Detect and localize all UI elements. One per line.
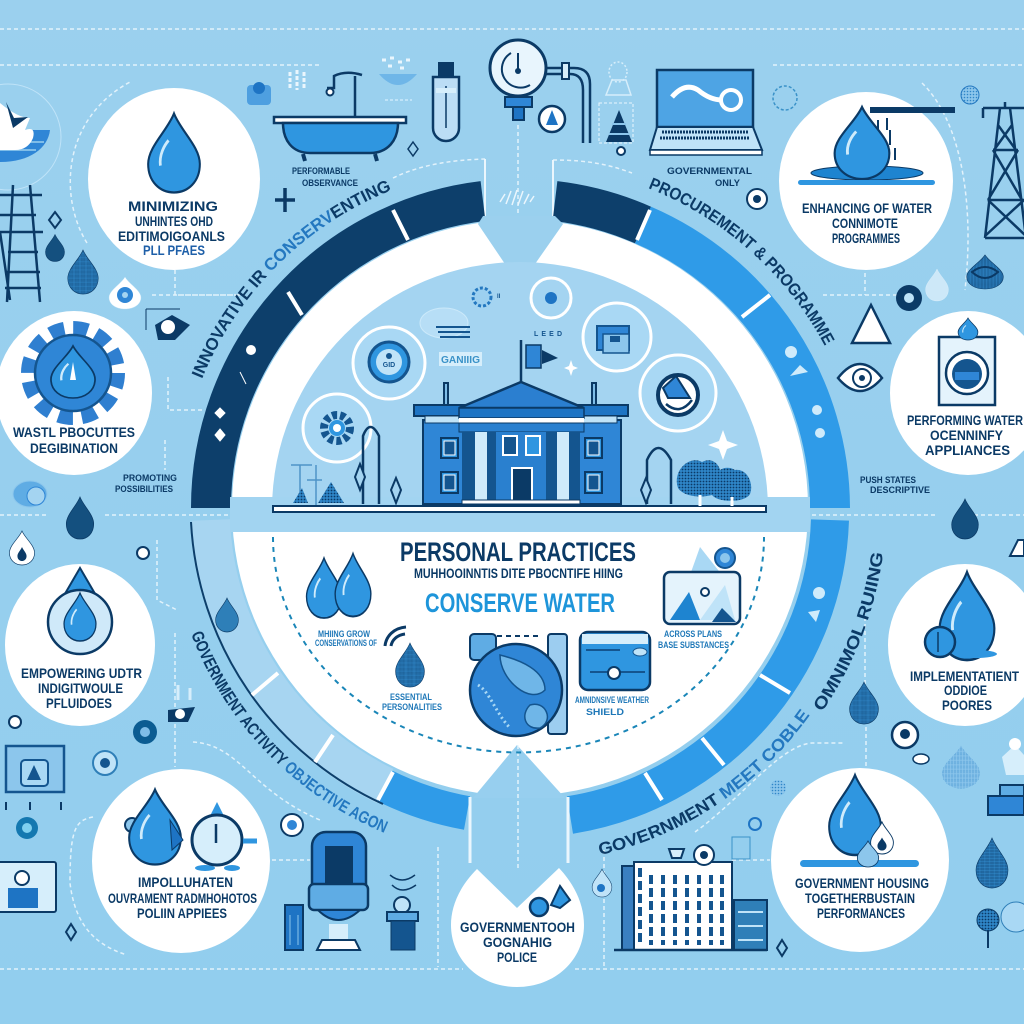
icon: pale dome: [606, 62, 631, 95]
arc heading bottom left: GOVERNMENT ACTIVITY OBJECTIVE AGON: [192, 632, 388, 832]
ring: lower-left blue segment: [385, 786, 467, 813]
icon: bathtub: [274, 73, 406, 161]
white disc: [232, 220, 808, 796]
icon: drop near ring: [216, 598, 238, 632]
icon: small diamond: [408, 142, 418, 156]
panel: gear circle: [0, 311, 152, 475]
panel: bottom center drop: [451, 868, 584, 987]
text: bottom center: [460, 919, 575, 965]
icon: dotted drop upper right: [967, 255, 1003, 289]
center hatch mark: [500, 190, 534, 205]
icon: trees right: [977, 902, 1024, 948]
icon: gear with drop: [30, 330, 116, 416]
icon: twin pins: [530, 886, 570, 916]
icon: monitor left: [6, 746, 64, 810]
text: top left: PLL PFAES: [143, 242, 205, 258]
text: lower right: POORES: [942, 697, 992, 713]
caption: bathtub: [292, 166, 358, 189]
small towers: [291, 465, 344, 505]
text: bottom center: POLICE: [497, 949, 537, 965]
text: lower left: PFLUIDOES: [46, 695, 112, 711]
icon: wifi and drop: [385, 627, 424, 687]
bottom notch: [473, 745, 565, 798]
arc heading top right: PROCUREMENT & PROGRAMME: [649, 178, 835, 346]
caption: bathtub: OBSERVANCE: [302, 178, 358, 189]
text: bottom center: GOVERNMENTOOH: [460, 919, 575, 935]
icon: washing machine: [939, 318, 995, 405]
caption 4: [658, 629, 729, 650]
panel: bottom right circle: [771, 768, 949, 952]
icon: globe with pipes: [470, 634, 567, 736]
icon: pressure gauge: [490, 40, 590, 143]
text: bottom center: GOGNAHIG: [483, 934, 552, 950]
text: washer circle: [907, 412, 1023, 458]
title: personal practices: PERSONAL PRACTICES: [400, 537, 636, 567]
text: lower right: ODDIOE: [944, 682, 987, 698]
text: top left: EDITIMOIGOANLS: [118, 228, 225, 244]
inner icon: printer circle: [583, 303, 651, 371]
text: lower right: [910, 668, 1019, 713]
icon: water drop: [148, 114, 200, 192]
text: bottom left: OUVRAMENT RADMHOHOTOS: [108, 890, 257, 906]
icon: drops on water: [800, 775, 919, 867]
icon: ladder tower: [0, 185, 43, 302]
markers top right: [747, 86, 979, 209]
title: conserve water: CONSERVE WATER: [425, 588, 615, 618]
arc heading right lower: OMNIMOL RUIING: [814, 553, 882, 710]
text: bottom right: PERFORMANCES: [817, 905, 905, 921]
white marks above tub: [290, 70, 304, 90]
icon: mountain picture: [664, 547, 740, 624]
icon: dotted drop far right: [976, 838, 1008, 888]
icon: dark drop right: [952, 499, 978, 539]
inner label: LEED: [534, 331, 562, 338]
icon: drop in ring: [48, 568, 112, 654]
icon: white drop left: [9, 531, 35, 565]
caption 2: ESSENTIAL: [390, 692, 432, 702]
ring glyphs: [215, 345, 825, 622]
icon: pedestal: [387, 875, 418, 950]
sparkles: [564, 360, 738, 460]
trees: [677, 460, 751, 506]
caption 3: SHIELD: [586, 707, 625, 717]
icon: small triangle right: [1010, 540, 1024, 556]
icon: test tube: [433, 62, 459, 141]
caption: laptop: ONLY: [715, 178, 741, 189]
icon: cloud brain left: [13, 481, 47, 507]
icon: dark drop left: [66, 497, 94, 539]
text: lower left: EMPOWERING UDTR: [21, 665, 142, 681]
text: lower left: [21, 665, 142, 711]
panel: top left circle: [88, 88, 260, 270]
panel: washer circle: [890, 311, 1024, 475]
caption right: PUSH STATES: [860, 475, 916, 486]
icon: cone: [599, 103, 633, 155]
inner icon: badge circle: GID: [383, 362, 395, 369]
building flag: [521, 340, 558, 382]
arc heading top left: INNOVATIVE IR CONSERVENTING: [192, 181, 390, 378]
caption right: [860, 475, 930, 496]
icon: monitor person: [0, 862, 56, 912]
icon: dotted drop lower: [850, 682, 878, 724]
inner icon: top ring: [531, 278, 571, 318]
icon: eye: [838, 364, 882, 391]
caption 1: [315, 629, 377, 648]
icon: pale dotted drop: [942, 746, 980, 788]
text: top right: ENHANCING OF WATER: [802, 200, 932, 216]
text: top left: UNHINTES OHD: [135, 213, 213, 229]
inner pale half circle: [272, 262, 768, 510]
panel: top right circle: [779, 92, 955, 270]
notch edges: [470, 797, 568, 863]
inner icon: gear circle: [303, 394, 371, 462]
text: top right: PROGRAMMES: [832, 230, 900, 246]
caption: bathtub: PERFORMABLE: [292, 166, 350, 177]
text: washer circle: OCENNINFY: [930, 427, 1004, 443]
government building: [414, 340, 628, 504]
text: lower left: INDIGITWOULE: [38, 680, 123, 696]
icon: cross: [275, 188, 295, 212]
icon: office building: [614, 862, 767, 950]
text: bottom left: POLIIN APPIEES: [137, 905, 227, 921]
text: bottom left: [108, 874, 257, 921]
icon: water fixture: [379, 58, 417, 100]
ring: upper-right blue segment: [643, 225, 830, 508]
icon: pale drop right: [926, 269, 948, 301]
ground line: [273, 506, 766, 512]
icon: dark dot: [896, 285, 922, 311]
inner icon: triangle circle: [640, 355, 716, 431]
icon: drop and gauge: [125, 790, 257, 871]
subtitle: MUHHOOINNTIS DITE PBOCNTIFE HIING: [414, 565, 623, 581]
central ring: [191, 201, 830, 815]
icon: laptop: [650, 70, 762, 155]
caption right: DESCRIPTIVE: [870, 485, 930, 496]
text: gear circle: DEGIBINATION: [30, 440, 118, 456]
inner icon: top gear: II: [497, 294, 501, 300]
icon: duck: [0, 84, 61, 190]
icon: water card: [580, 632, 650, 690]
caption 3: AMNIDNSIVE WEATHER: [575, 695, 649, 705]
caption 3: [575, 695, 649, 717]
ring: dark upper-left arc: [211, 201, 483, 508]
caption left: POSSIBILITIES: [115, 484, 173, 495]
caption left: PROMOTING: [123, 473, 177, 484]
caption 4: BASE SUBSTANCES: [658, 640, 729, 650]
text: bottom right: TOGETHERBUSTAIN: [805, 890, 915, 906]
small markers left: [9, 547, 787, 956]
left arch: [355, 427, 401, 504]
ring: lower-left pale segment: [211, 520, 385, 786]
ring: thin dark outline: [191, 522, 383, 804]
text: top right: CONNIMOTE: [832, 215, 898, 231]
caption 1: CONSERVATIONS OF: [315, 638, 377, 648]
text: top left: MINIMIZING: [128, 198, 218, 214]
text: gear circle: [13, 424, 135, 456]
icon: chat badge: [146, 309, 190, 340]
caption 1: MHIING GROW: [318, 629, 370, 639]
caption: laptop: [667, 166, 752, 189]
inner icon: top gear: [473, 288, 501, 306]
icon: markers near building: [669, 780, 786, 865]
text: top left: [118, 198, 225, 258]
inner icon: cloud: [420, 308, 470, 338]
dashed semicircle: [273, 537, 764, 752]
horizontal band: [230, 497, 810, 532]
text: bottom right: GOVERNMENT HOUSING: [795, 875, 929, 891]
panel: lower right circle: [888, 564, 1024, 726]
text: top right: [802, 200, 932, 246]
icon: drops left: [46, 212, 141, 309]
ring: lower-right blue segment: [570, 520, 830, 815]
icon: eye dot marker: [892, 722, 929, 764]
icon: megaphone: [168, 685, 195, 722]
text: washer circle: APPLIANCES: [925, 442, 1010, 458]
caption 2: PERSONALITIES: [382, 702, 442, 712]
panel: lower left circle: [5, 564, 155, 726]
top notch: [478, 216, 563, 264]
right arch: [641, 448, 671, 504]
inner icon: small sign: GANIIIG: [441, 355, 480, 366]
icon: drop near building: [592, 869, 612, 897]
icon: cabinet: [285, 905, 303, 950]
ring: upper-right dark segment: [555, 201, 643, 225]
icon: drop in pool: [798, 107, 955, 185]
icon: drop with small circle: [925, 572, 997, 660]
panel: bottom left circle: [92, 769, 270, 953]
icon: steps and figure: [988, 738, 1024, 815]
icon: small badge: [247, 82, 271, 105]
icon: triangle: [852, 305, 890, 343]
icon: power tower: [983, 102, 1024, 238]
title: personal practices: [400, 537, 636, 581]
icon: small circle top: [539, 106, 565, 132]
icon: twin drops: [307, 554, 371, 618]
caption 4: ACROSS PLANS: [664, 629, 722, 639]
text: bottom left: IMPOLLUHATEN: [138, 874, 233, 890]
arc heading bottom right: GOVERNMENT MEET COBLE: [599, 708, 810, 854]
text: bottom right: [795, 875, 929, 921]
chimneys: [446, 382, 594, 405]
inner icon: badge circle: [353, 327, 425, 399]
caption: laptop: GOVERNMENTAL: [667, 166, 752, 177]
icon: toilet: [309, 832, 368, 950]
caption 2: [382, 692, 442, 712]
caption left: [115, 473, 177, 495]
text: gear circle: WASTL PBOCUTTES: [13, 424, 135, 440]
